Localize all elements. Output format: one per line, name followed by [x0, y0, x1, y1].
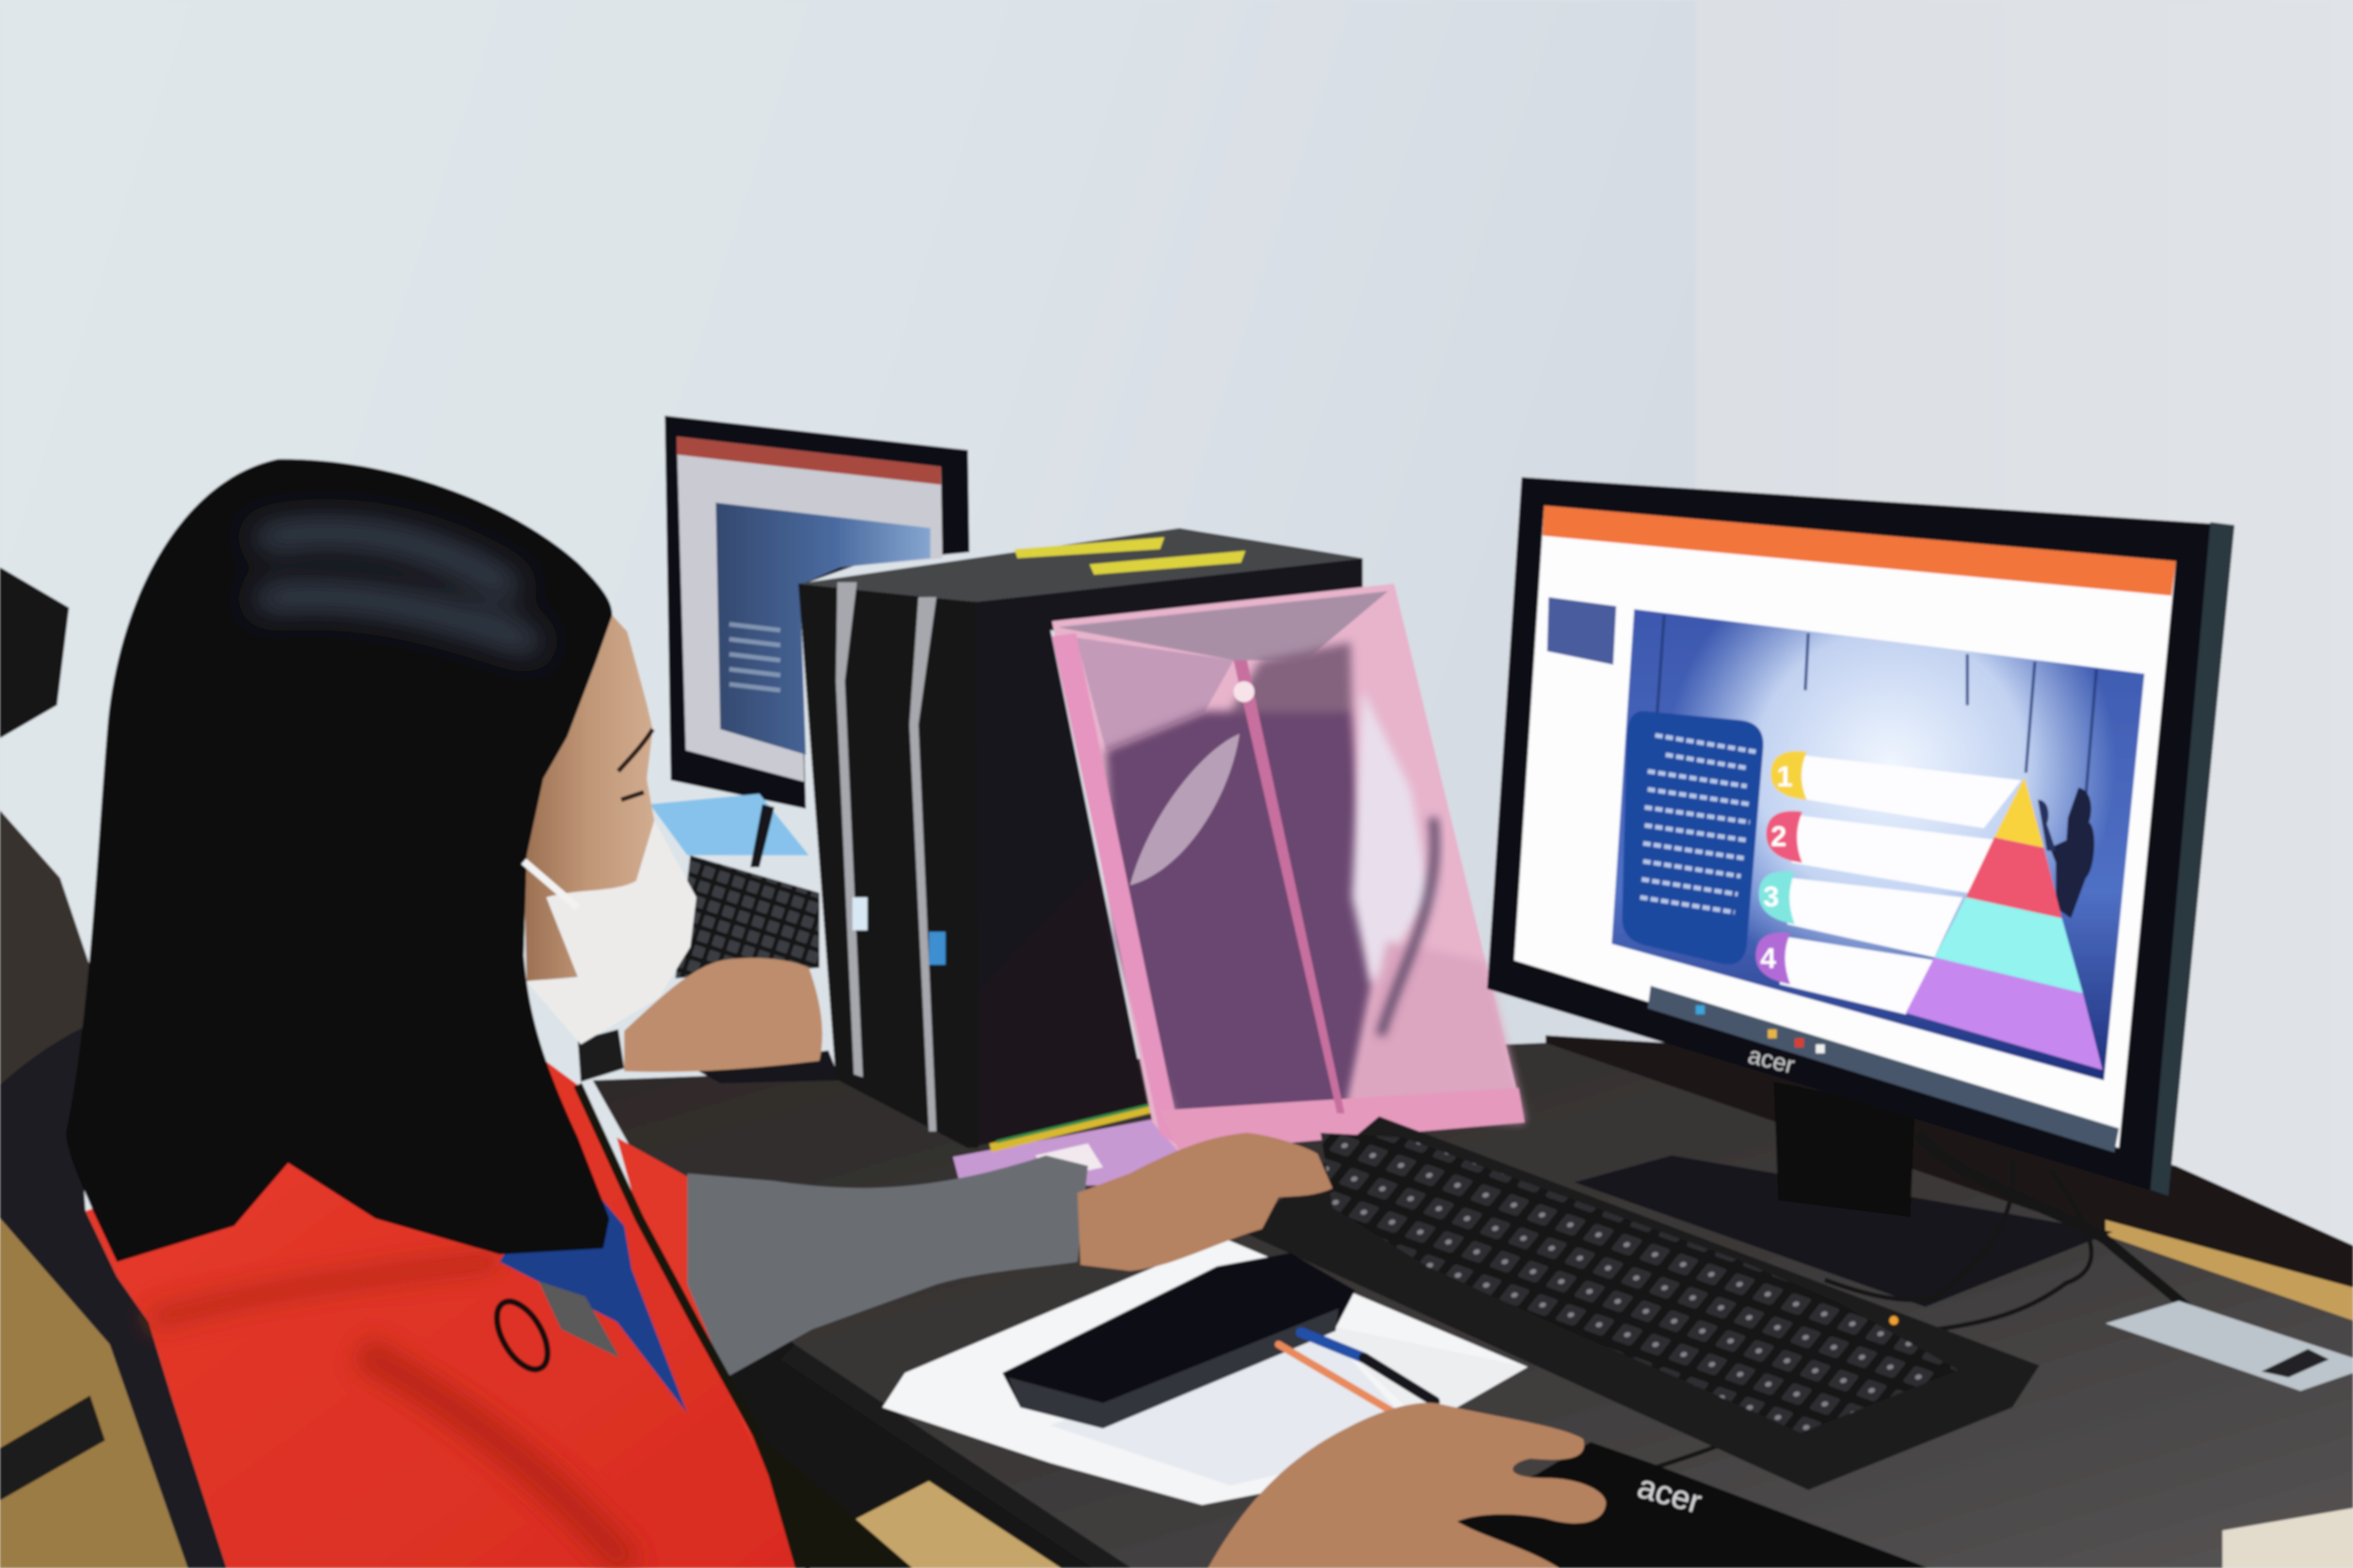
list rows: 3 — [1763, 882, 1779, 913]
back keyboard — [675, 856, 820, 978]
left folder edge — [1052, 633, 1182, 1148]
presentation slide — [1611, 609, 2144, 1080]
centre seam — [1234, 660, 1345, 1113]
slide thumbnail — [1547, 598, 1616, 664]
pale right area — [1348, 690, 1525, 1123]
computer towers — [798, 528, 1363, 1148]
white object at corner — [2222, 1508, 2353, 1568]
back monitor — [649, 416, 969, 867]
floor and baseboard — [1545, 1035, 2353, 1336]
monitor stand — [1575, 1081, 2113, 1307]
mouse mat of background user — [696, 1050, 840, 1083]
folder flap — [1058, 591, 1388, 660]
jacket zipper — [578, 1085, 810, 1568]
notebook and pencil under folder — [952, 1104, 1186, 1185]
application title bar — [1543, 505, 2176, 596]
desk — [593, 1043, 2353, 1568]
monitor cables — [1606, 1134, 2191, 1484]
grey collar patch — [538, 1281, 619, 1358]
eyebrow and eye — [618, 729, 653, 800]
keyboard — [1242, 1116, 2040, 1490]
list rows: 4 — [1760, 943, 1776, 974]
ear strap — [523, 861, 578, 908]
windows taskbar — [1648, 985, 2119, 1152]
reflection — [1130, 734, 1240, 886]
hair — [66, 459, 613, 1262]
cable port box — [2105, 1301, 2353, 1391]
grey sleeve — [687, 1156, 1088, 1378]
pyramid — [1906, 777, 2103, 1070]
face mask — [523, 821, 696, 1045]
background user's hand — [578, 958, 823, 1081]
smartphone — [1002, 1253, 1355, 1429]
bottom folder edge — [1160, 1088, 1525, 1152]
pink plastic folder — [1052, 584, 1525, 1152]
mouse pad: acer — [1634, 1468, 1705, 1521]
tower body — [798, 558, 1363, 1148]
list rows — [1755, 751, 2022, 1015]
yellow stickers — [1015, 537, 1245, 575]
silhouette figures — [2038, 788, 2094, 919]
tower seen through folder — [1106, 642, 1371, 1131]
tower fronts — [798, 583, 979, 1148]
drawstring loop — [487, 1293, 558, 1378]
tower top face — [798, 528, 1363, 601]
red jacket — [86, 1050, 795, 1568]
hand on mouse — [1208, 1403, 1606, 1568]
person in background at left — [0, 568, 93, 1096]
hand on keyboard — [1078, 1133, 1333, 1271]
hair highlights — [255, 533, 540, 646]
text panel — [1622, 712, 1763, 965]
area under desk — [661, 1200, 1131, 1568]
mouse pad — [1456, 1442, 1929, 1568]
dark jacket hem — [757, 1433, 912, 1568]
pens — [1278, 1333, 1434, 1414]
person — [66, 459, 1333, 1568]
main monitor — [1487, 477, 2234, 1196]
cables through folder — [1381, 818, 1434, 1035]
face — [523, 616, 654, 982]
chair — [0, 1026, 227, 1568]
snap button — [1234, 681, 1255, 702]
monitor screen — [1514, 505, 2176, 1148]
list rows: 2 — [1770, 822, 1786, 853]
slide building lines — [1657, 616, 2096, 795]
monitor brand: acer — [1745, 1042, 1798, 1080]
jacket folds — [150, 1260, 631, 1568]
blue scarf — [500, 1151, 687, 1414]
red front panel beside zip — [616, 1137, 757, 1451]
mouse — [1478, 1467, 1603, 1545]
list rows: 1 — [1777, 761, 1793, 792]
paper documents — [883, 1238, 1528, 1505]
